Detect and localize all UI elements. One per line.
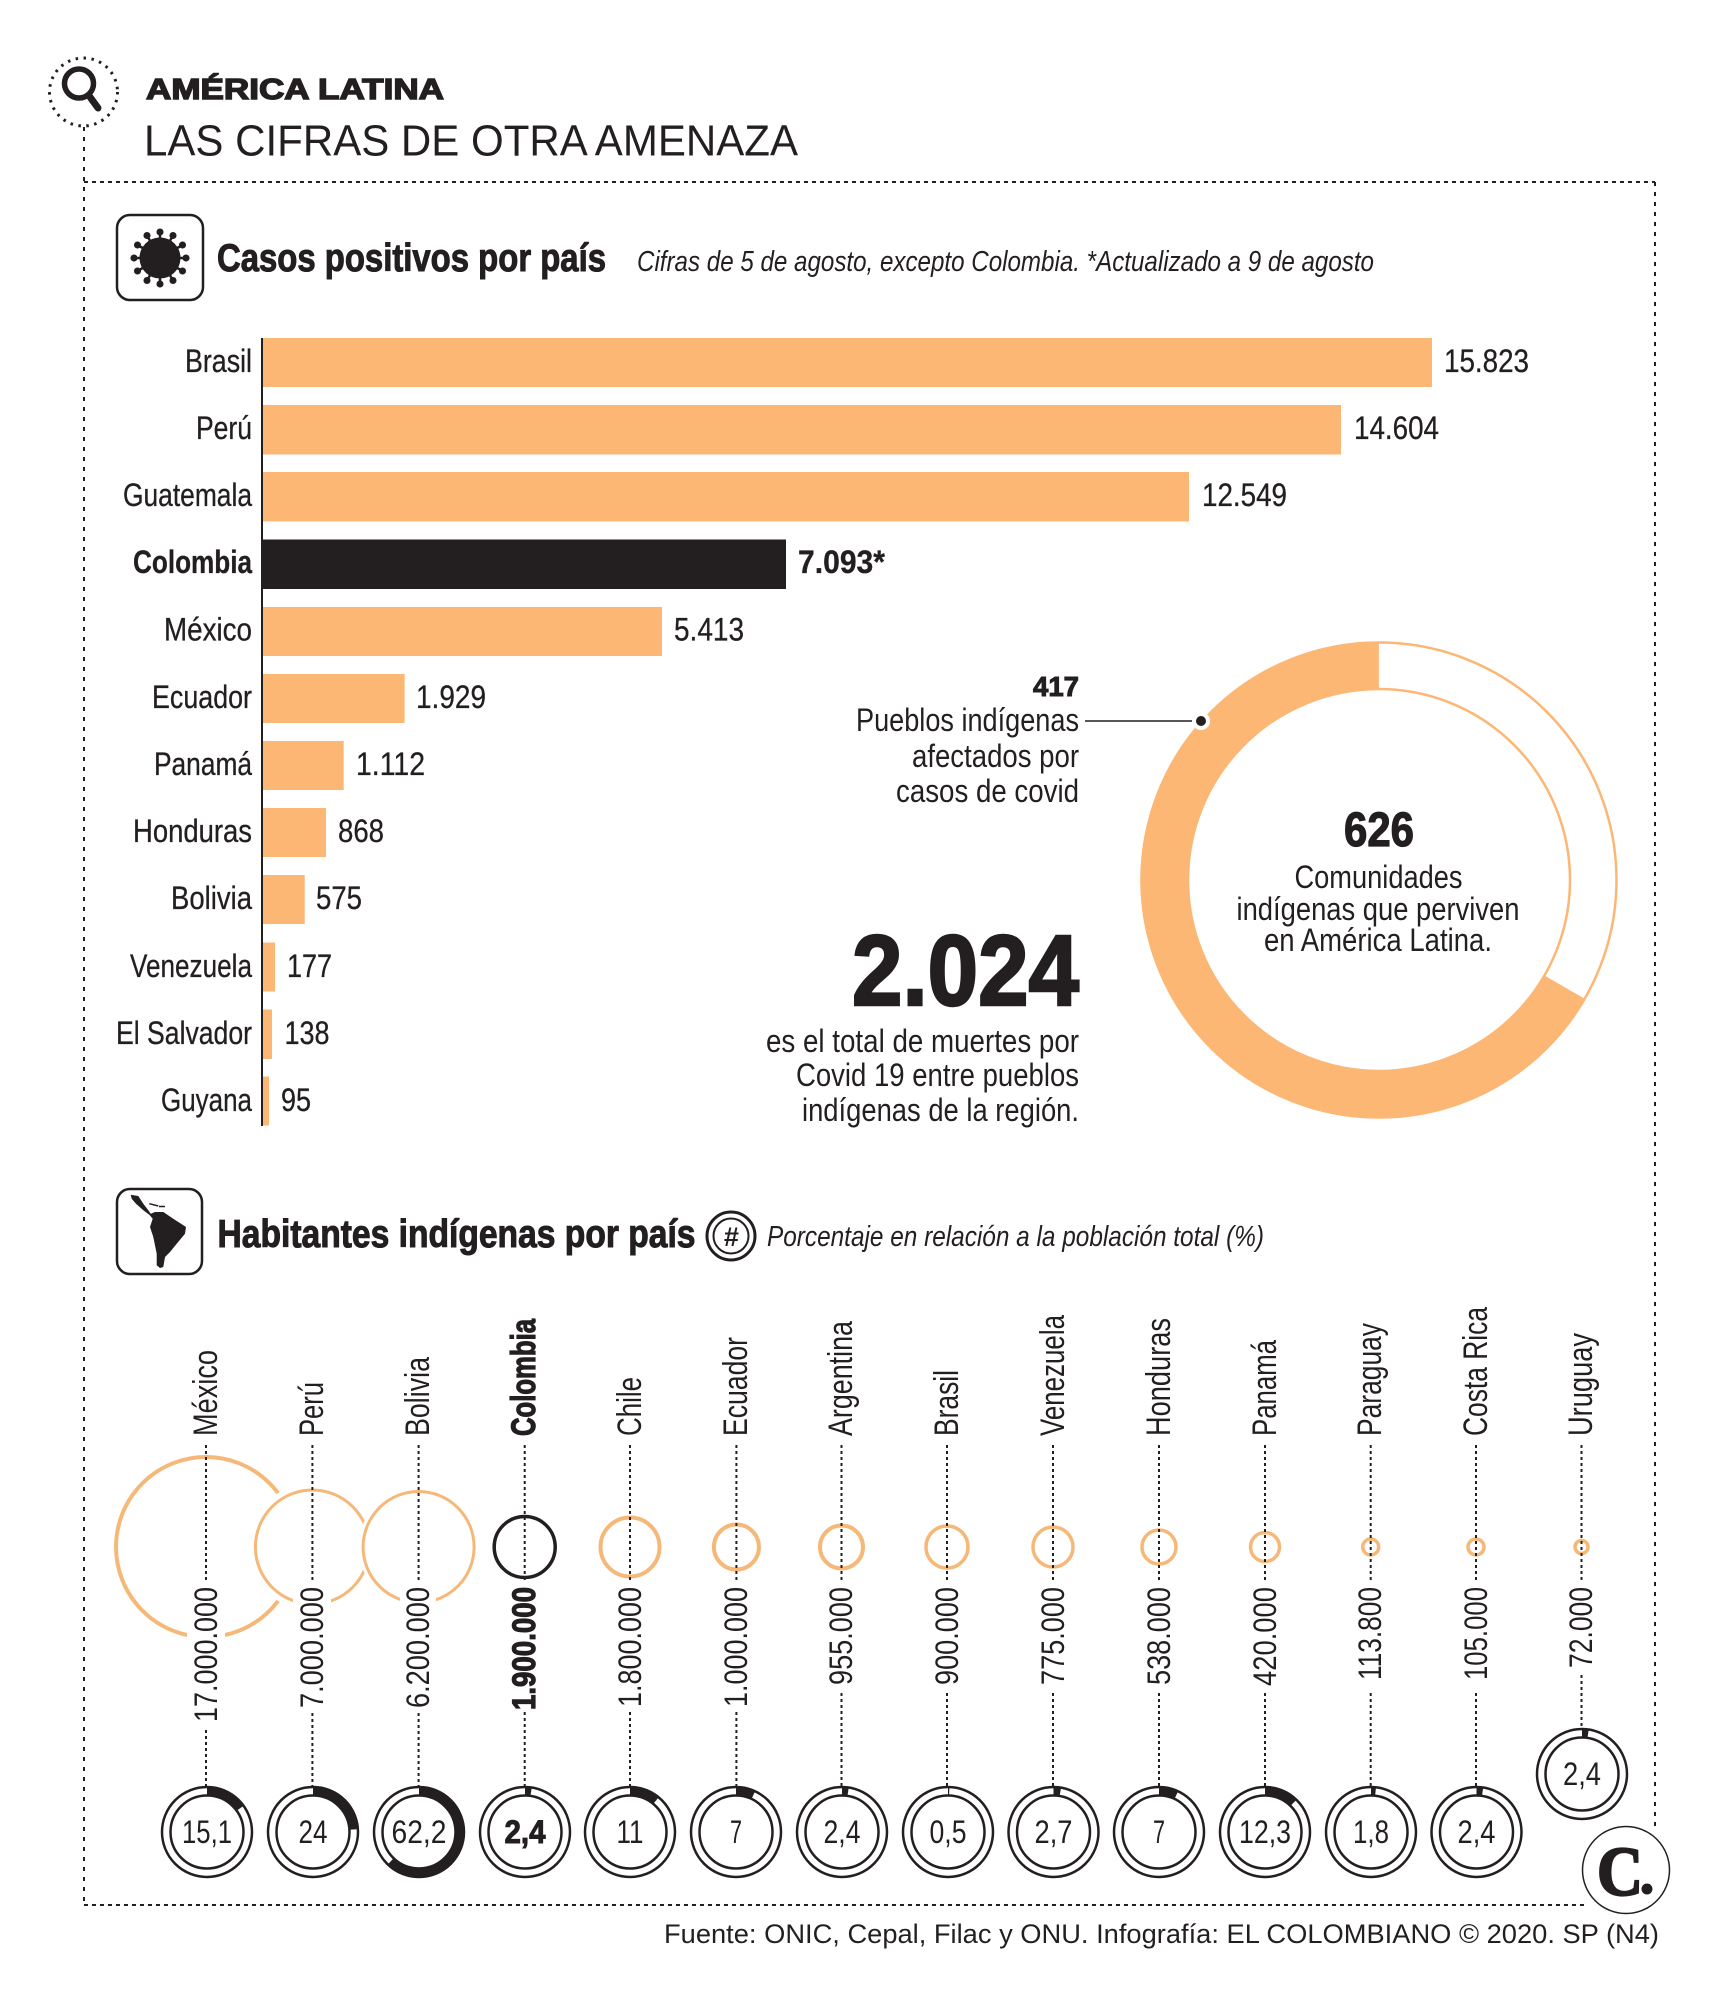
column: Perú: 24	[298, 1814, 328, 1850]
column: Paraguay	[1326, 1323, 1416, 1877]
bar chart: casos positivos: 868	[338, 813, 384, 849]
callout: 417 pueblos: casos de covid	[896, 773, 1079, 809]
column: Brasil: 900.000	[929, 1587, 965, 1685]
stat: 2.024 muertes: es el total de muertes por	[766, 1023, 1079, 1059]
main title: LAS CIFRAS DE OTRA AMENAZA	[144, 116, 799, 166]
icon: magnifying glass in dotted circle	[50, 58, 118, 126]
callout: 417 pueblos: 417	[1033, 671, 1079, 702]
bar chart: casos positivos: 575	[316, 880, 362, 916]
donut chart: comunidades indígenas: 626	[1344, 804, 1414, 857]
title kicker: AMÉRICA LATINA	[146, 72, 444, 106]
column: Honduras: 538.000	[1141, 1587, 1177, 1685]
callout: 417 pueblos: afectados por	[912, 738, 1079, 774]
column: Argentina: Argentina	[822, 1321, 860, 1436]
column: Argentina	[797, 1321, 887, 1877]
column: Bolivia: Bolivia	[399, 1357, 437, 1436]
column: México	[116, 1350, 296, 1877]
column: Honduras: Honduras	[1140, 1318, 1178, 1436]
column: Colombia: 2,4	[504, 1814, 546, 1850]
bar chart: casos positivos: 138	[284, 1015, 330, 1051]
column: Brasil: Brasil	[928, 1370, 966, 1436]
donut chart: comunidades indígenas	[1086, 587, 1672, 1173]
bar chart: casos positivos: El Salvador	[116, 1015, 252, 1051]
column: Paraguay: 1,8	[1353, 1814, 1389, 1850]
column: Paraguay: 113.800	[1352, 1587, 1388, 1680]
column: Ecuador: 1.000.000	[718, 1587, 754, 1707]
column: Bolivia: 6.200.000	[400, 1587, 436, 1708]
column: Chile: Chile	[611, 1377, 649, 1436]
column: Costa Rica	[1432, 1307, 1522, 1877]
column: Perú: Perú	[293, 1382, 331, 1436]
bar chart: casos positivos	[116, 338, 1529, 1126]
column: Panamá: 420.000	[1247, 1587, 1283, 1686]
bar chart: casos positivos: Colombia	[133, 544, 252, 580]
column: Ecuador: Ecuador	[717, 1337, 755, 1436]
column: Uruguay	[1537, 1333, 1627, 1819]
column: Bolivia	[359, 1357, 479, 1877]
column: Perú: 7.000.000	[294, 1587, 330, 1708]
callout: 417 pueblos: Pueblos indígenas	[856, 702, 1079, 738]
column: Venezuela: 2,7	[1034, 1814, 1072, 1850]
column: Argentina: 2,4	[824, 1814, 860, 1850]
note: fecha de cifras: Cifras de 5 de agosto, excepto Colombia. *Actualizado a 9 de agosto	[637, 246, 1374, 278]
column: Ecuador	[691, 1337, 781, 1877]
icon: mapa de América Latina	[117, 1189, 202, 1274]
column: Venezuela: 775.000	[1035, 1587, 1071, 1685]
bar chart: casos positivos: 15.823	[1444, 343, 1529, 379]
column: Panamá: Panamá	[1246, 1340, 1284, 1436]
column: Costa Rica: Costa Rica	[1457, 1307, 1495, 1436]
heading: casos positivos: Casos positivos por país	[217, 237, 606, 280]
bar chart: casos positivos: Ecuador	[152, 679, 252, 715]
bar chart: casos positivos: 1.929	[416, 679, 486, 715]
icon: legend ring with #	[707, 1212, 755, 1260]
bar chart: casos positivos: Honduras	[133, 813, 252, 849]
column: Costa Rica: 105.000	[1458, 1587, 1494, 1680]
column: Uruguay: 72.000	[1563, 1587, 1599, 1668]
column: Honduras: 7	[1153, 1814, 1165, 1850]
column: Venezuela: Venezuela	[1034, 1315, 1072, 1436]
column: Uruguay: 2,4	[1563, 1756, 1601, 1792]
column: Perú	[248, 1382, 376, 1877]
heading: habitantes indígenas: Habitantes indígenas por país	[218, 1213, 696, 1256]
column: Panamá	[1220, 1340, 1310, 1877]
icon: virus	[117, 215, 203, 300]
column: Uruguay: Uruguay	[1562, 1333, 1600, 1436]
donut chart: comunidades indígenas: indígenas que perviven	[1236, 891, 1520, 927]
column: Argentina: 955.000	[823, 1587, 859, 1685]
bar chart: casos positivos: 1.112	[356, 746, 425, 782]
donut chart: comunidades indígenas: Comunidades	[1294, 859, 1462, 895]
bar chart: casos positivos: 177	[287, 948, 332, 984]
bar chart: casos positivos: 95	[281, 1082, 311, 1118]
stat: 2.024 muertes: Covid 19 entre pueblos	[796, 1057, 1079, 1093]
bar chart: casos positivos: 14.604	[1354, 410, 1439, 446]
column: Venezuela	[1008, 1315, 1098, 1877]
column: Brasil: 0,5	[930, 1814, 966, 1850]
stat: 2.024 muertes: indígenas de la región.	[802, 1092, 1079, 1128]
column: México: 15,1	[182, 1814, 232, 1850]
logo: El Colombiano C.: C	[1597, 1834, 1643, 1911]
column: Colombia	[480, 1318, 570, 1877]
column: México: 17.000.000	[188, 1587, 224, 1722]
column: Colombia: 1.900.000	[506, 1587, 542, 1710]
bar chart: casos positivos: 5.413	[674, 612, 744, 648]
bar chart: casos positivos: 7.093*	[798, 544, 886, 580]
bar chart: casos positivos: Guatemala	[123, 477, 252, 513]
bar chart: casos positivos: 12.549	[1202, 477, 1287, 513]
bar chart: casos positivos: Perú	[196, 410, 252, 446]
bar chart: casos positivos: Bolivia	[171, 880, 252, 916]
callout: 417 pueblos	[856, 671, 1210, 809]
bar chart: casos positivos: Guyana	[161, 1082, 252, 1118]
logo: El Colombiano C.	[1582, 1826, 1670, 1914]
column: Chile	[585, 1377, 675, 1877]
column: Bolivia: 62,2	[392, 1814, 446, 1850]
column: Honduras	[1114, 1318, 1204, 1877]
note: porcentaje: Porcentaje en relación a la población total (%)	[767, 1221, 1264, 1253]
icon: legend ring with #: #	[723, 1222, 739, 1252]
bar chart: casos positivos: Venezuela	[130, 948, 252, 984]
column: Chile: 11	[616, 1814, 644, 1850]
column: Panamá: 12,3	[1239, 1814, 1291, 1850]
stat: 2.024 muertes: 2.024	[852, 915, 1079, 1027]
bar chart: casos positivos: México	[164, 612, 252, 648]
stat: 2.024 muertes	[766, 915, 1079, 1128]
donut chart: comunidades indígenas: en América Latina.	[1264, 922, 1492, 958]
column: Costa Rica: 2,4	[1458, 1814, 1496, 1850]
column: Chile: 1.800.000	[612, 1587, 648, 1707]
source line: Fuente: ONIC, Cepal, Filac y ONU. Infografía: EL COLOMBIANO © 2020. SP (N4)	[664, 1919, 1659, 1949]
bar chart: casos positivos: Brasil	[185, 343, 252, 379]
column: Brasil	[903, 1370, 993, 1877]
column: México: México	[187, 1350, 225, 1436]
column: Paraguay: Paraguay	[1351, 1323, 1389, 1436]
column: Colombia: Colombia	[505, 1318, 543, 1436]
bar chart: casos positivos: Panamá	[154, 746, 252, 782]
column: Ecuador: 7	[730, 1814, 742, 1850]
